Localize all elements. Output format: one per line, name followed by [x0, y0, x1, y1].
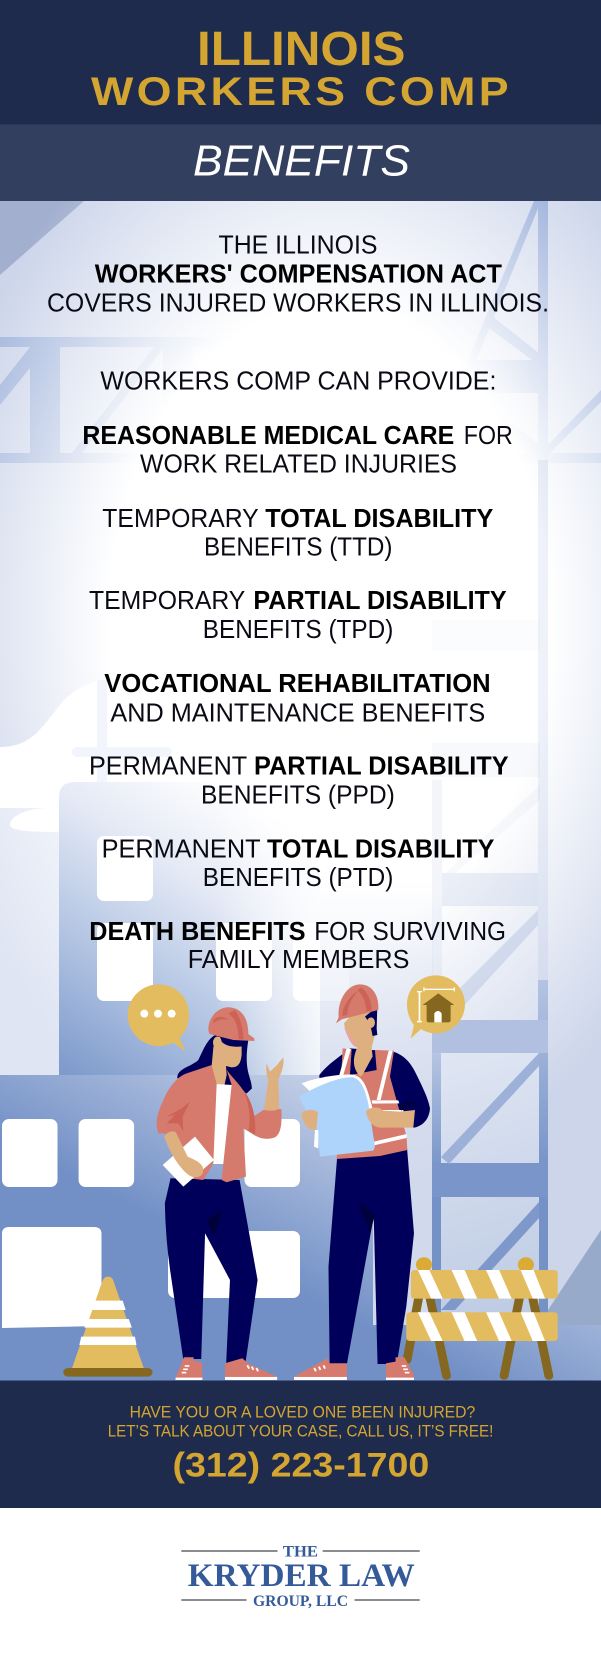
panel: call to action footer: [0, 1380, 601, 1508]
benefit: permanent total disability: BENEFITS (PTD): [203, 864, 393, 892]
benefit: permanent partial disability: [89, 752, 509, 809]
benefit: vocational rehabilitation: AND MAINTENANCE BENEFITS: [110, 699, 485, 727]
text: list heading: WORKERS COMP CAN PROVIDE:: [100, 367, 496, 395]
fog overlay: [0, 201, 601, 1381]
title: Illinois: ILLINOIS: [197, 23, 406, 76]
benefit: temporary total disability: [102, 505, 493, 561]
woman upper body: [157, 1007, 284, 1187]
benefit: reasonable medical care: WORK RELATED INJURIES: [140, 451, 457, 479]
benefit: permanent total disability: TOTAL DISABILITY: [267, 835, 494, 863]
white cloud shape: [0, 670, 240, 832]
lower right scaffold: [432, 980, 548, 1325]
figure: woman worker: [157, 1007, 284, 1380]
figure: man worker: [294, 984, 430, 1380]
panel: illustrated background: [0, 201, 601, 1381]
text: call to action: LET’S TALK ABOUT YOUR CASE, CALL US, IT’S FREE!: [108, 1421, 493, 1440]
icon: speech bubble with house plan: [407, 975, 465, 1039]
lower building: [0, 1075, 601, 1381]
intro text block: COVERS INJURED WORKERS IN ILLINOIS.: [47, 289, 549, 317]
upper building: [59, 782, 320, 1075]
icon: traffic cone: [63, 1277, 153, 1377]
icon: road barrier: [406, 1257, 558, 1376]
benefit: temporary partial disability: PARTIAL DISABILITY: [253, 587, 507, 615]
logo: The Kryder Law Group: [181, 1544, 420, 1610]
benefit: death benefits: [89, 918, 506, 974]
benefit: permanent total disability: PERMANENT: [102, 835, 261, 863]
right light column: [320, 880, 433, 1325]
benefit: permanent partial disability: BENEFITS (PPD): [201, 781, 395, 809]
benefit: vocational rehabilitation: VOCATIONAL REHABILITATION: [104, 670, 491, 698]
benefit: death benefits: FOR SURVIVING: [314, 918, 506, 946]
logo: The Kryder Law Group: GROUP, LLC: [253, 1593, 348, 1610]
text: call to action: HAVE YOU OR A LOVED ONE BEEN INJURED?: [130, 1402, 475, 1421]
panel: title header: [0, 0, 601, 124]
lower building windows: [2, 1119, 300, 1328]
scaffold: upper left: [0, 337, 601, 463]
woman legs and shoes: [165, 1178, 277, 1380]
logo: The Kryder Law Group: KRYDER LAW: [188, 1558, 415, 1594]
intro text block: THE ILLINOIS: [218, 232, 378, 260]
benefit: vocational rehabilitation: [104, 670, 491, 727]
scaffold: mid right: [432, 460, 548, 1008]
man legs and shoes: [294, 1148, 414, 1380]
benefit: permanent total disability: [102, 835, 494, 892]
text: phone number: (312) 223-1700: [172, 1447, 429, 1485]
benefit: reasonable medical care: [82, 422, 513, 479]
benefit: reasonable medical care: REASONABLE MEDICAL CARE: [82, 422, 454, 450]
benefit: death benefits: DEATH BENEFITS: [89, 918, 306, 946]
text: call to action: [108, 1402, 493, 1440]
intro text block: WORKERS' COMPENSATION ACT: [95, 261, 502, 289]
benefit: temporary total disability: TOTAL DISABILITY: [265, 505, 493, 533]
title: Workers Comp: WORKERS COMP: [91, 70, 512, 114]
subtitle band: [0, 124, 601, 201]
icon: speech bubble with dots: [128, 984, 189, 1051]
man upper body: [299, 984, 430, 1159]
benefit: temporary partial disability: BENEFITS (TPD): [203, 616, 393, 644]
benefit: death benefits: FAMILY MEMBERS: [188, 946, 409, 974]
subtitle: Benefits: BENEFITS: [193, 138, 410, 186]
upper building windows: [97, 836, 349, 1001]
right slope: [545, 1230, 601, 1325]
benefit: temporary total disability: BENEFITS (TTD): [204, 533, 392, 561]
intro text block: [47, 232, 549, 317]
benefit: reasonable medical care: FOR: [464, 422, 513, 450]
upper building right fade: [215, 782, 320, 1075]
benefit: permanent partial disability: PERMANENT: [89, 752, 247, 780]
logo: The Kryder Law Group: THE: [283, 1544, 318, 1561]
scaffold: right tower: [441, 201, 601, 601]
corner triangle: [0, 201, 84, 275]
scaffold post: [72, 680, 172, 782]
benefit: temporary partial disability: TEMPORARY: [89, 587, 245, 615]
benefit: temporary partial disability: [89, 587, 507, 644]
benefit: permanent partial disability: PARTIAL DISABILITY: [254, 752, 509, 780]
benefit: temporary total disability: TEMPORARY: [102, 505, 259, 533]
